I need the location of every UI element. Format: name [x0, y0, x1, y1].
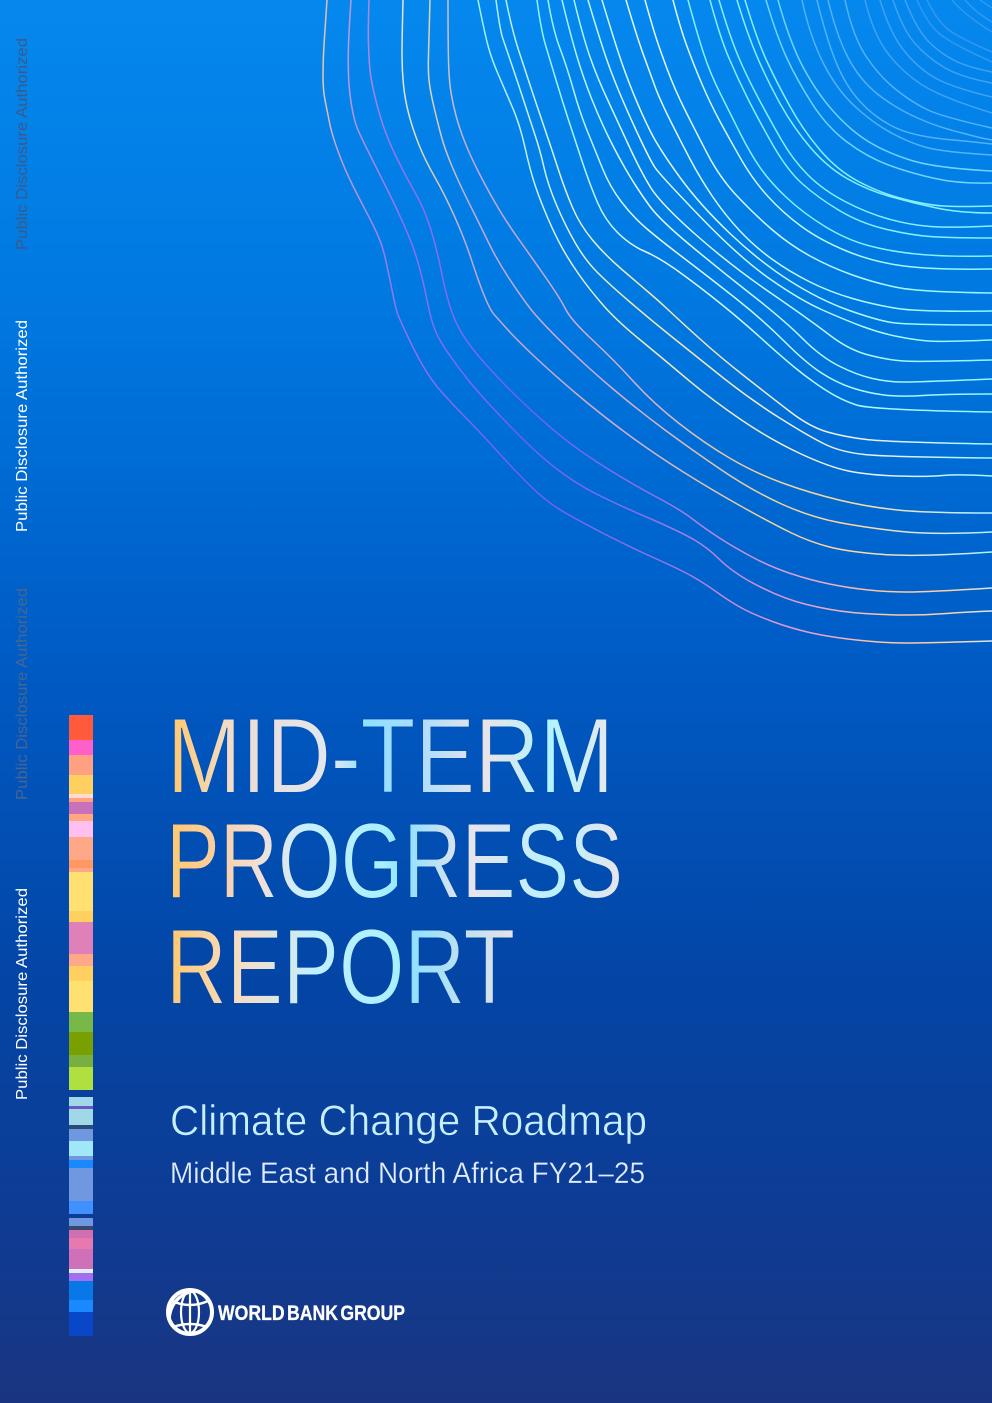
side watermark: public disclosure stamps — [14, 38, 31, 1100]
title: mid-term progress report: MID-TERM — [167, 696, 614, 816]
side watermark: public disclosure stamps: Public Disclosure Authorized — [14, 320, 31, 532]
side watermark: public disclosure stamps: Public Disclosure Authorized — [14, 588, 31, 800]
subtitle: region and period: Middle East and North Africa FY21–25 — [170, 1157, 645, 1190]
subtitle: climate change roadmap: Climate Change Roadmap — [170, 1097, 647, 1145]
icon: globe — [168, 1290, 212, 1334]
side watermark: public disclosure stamps: Public Disclosure Authorized — [14, 38, 31, 250]
title: mid-term progress report: PROGRESS — [166, 800, 623, 920]
logo: world bank group — [168, 1290, 405, 1334]
contour line graphic — [323, 0, 992, 643]
title: mid-term progress report: REPORT — [166, 906, 515, 1026]
side watermark: public disclosure stamps: Public Disclosure Authorized — [14, 888, 31, 1100]
logo wordmark: WORLD BANK GROUP — [218, 1301, 405, 1325]
title: mid-term progress report — [166, 696, 623, 1026]
colour stripe bar — [69, 715, 93, 1336]
